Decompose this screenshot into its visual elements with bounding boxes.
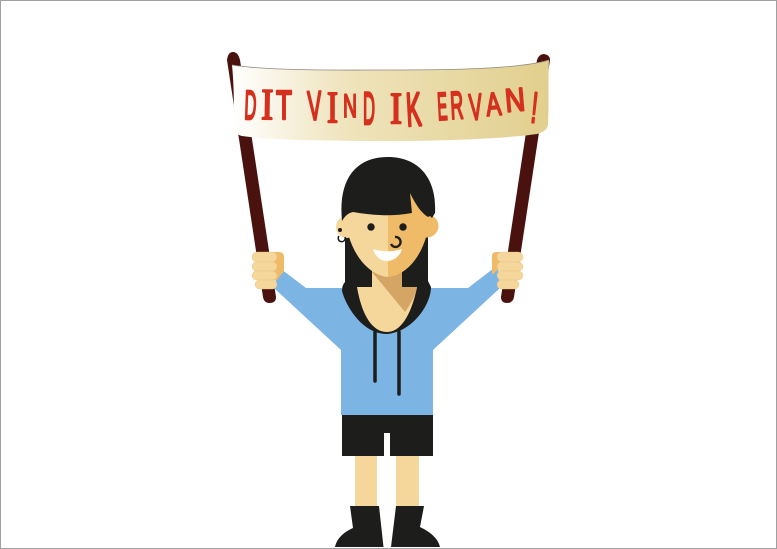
banner text: N [503,80,527,119]
banner text: T [276,82,292,128]
legs [355,450,419,510]
hood and long hair [342,210,431,334]
right banner pole [501,54,550,303]
face right half [388,190,430,277]
banner text: I [327,83,338,132]
shorts [342,415,433,456]
banner text [244,80,540,137]
boots [335,506,440,547]
banner text: N [343,87,357,124]
banner [232,60,549,141]
banner text: V [307,83,323,129]
left hand [252,252,284,289]
banner text: K [405,84,423,137]
banner text: D [363,84,375,134]
banner text: E [436,85,448,129]
banner text: A [484,85,503,123]
hair fringe [341,157,435,221]
chest skin [357,287,417,332]
banner text: V [468,87,484,128]
left banner pole [227,52,276,303]
earrings [338,228,345,242]
face left half [345,190,388,277]
banner text: I [261,80,274,129]
banner text: I [390,84,402,133]
banner text: D [244,82,257,128]
banner text: ! [529,83,540,132]
right hand [492,252,523,289]
banner text: R [449,84,464,128]
mouth [373,249,402,261]
eyes [367,223,375,231]
sweater [275,265,500,415]
neck [372,265,417,312]
head [336,157,438,277]
ears [336,216,358,238]
hoodie strings [375,332,399,394]
nose ring [391,237,401,247]
